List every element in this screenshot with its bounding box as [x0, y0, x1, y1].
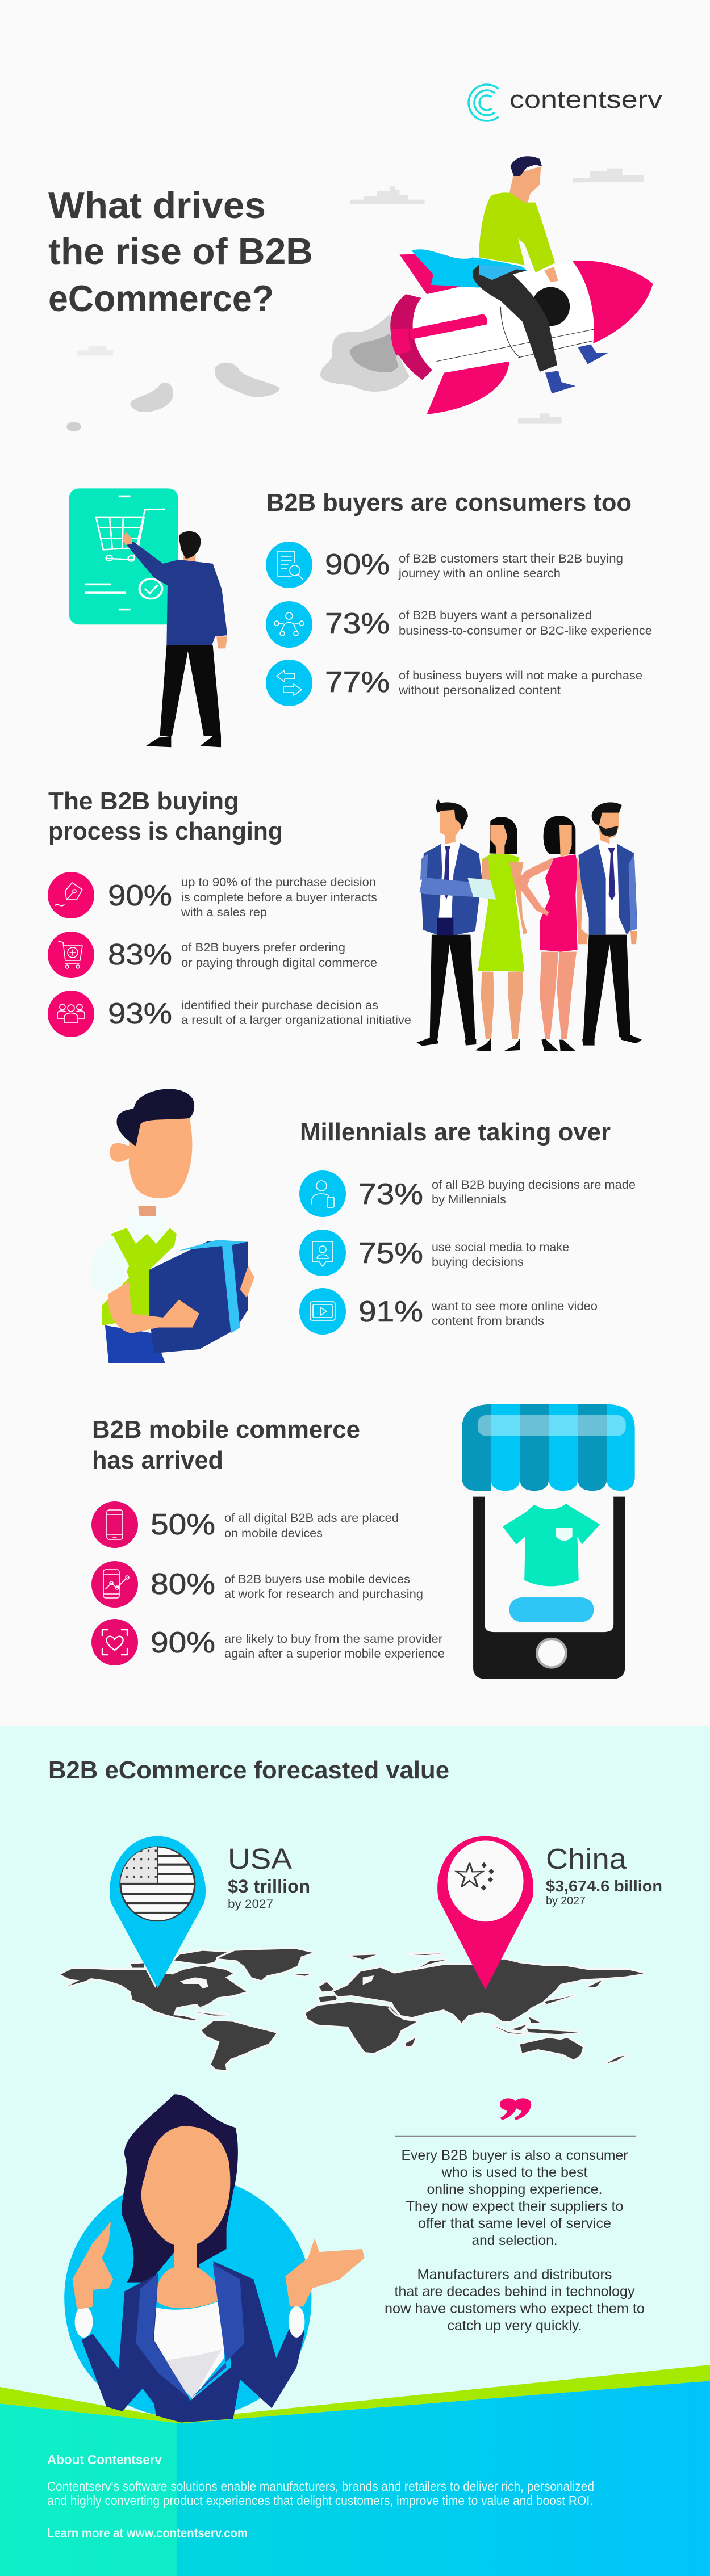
stat: 93% organizational initiative: [48, 991, 411, 1037]
description: [398, 669, 642, 697]
description: [432, 1178, 636, 1206]
stat: 73% decisions by Millennials: [299, 1170, 636, 1217]
description: of all B2B buying decisions are made: [432, 1178, 636, 1191]
description: at work for research and purchasing: [224, 1588, 423, 1601]
heading: B2B mobile commerce: [92, 1416, 360, 1444]
China value: China: [546, 1843, 627, 1875]
heading: [92, 1416, 360, 1474]
heading: The B2B buying: [48, 787, 239, 815]
description: by Millennials: [432, 1193, 506, 1206]
panel: B2B mobile commerce has arrived: [91, 1404, 635, 1679]
description: content from brands: [432, 1315, 544, 1328]
illustration: man at tablet with cart: [69, 488, 227, 747]
description: [224, 1573, 423, 1601]
stat: 73% B2C-like experience: [266, 601, 652, 648]
heading: B2B buyers are consumers too: [266, 489, 632, 517]
description: of B2B buyers prefer ordering: [181, 941, 345, 954]
description: on mobile devices: [224, 1527, 323, 1540]
illustration: woman presenting: [64, 2094, 365, 2423]
China pin: [437, 1836, 533, 1990]
title: eCommerce?: [48, 278, 274, 319]
description: is complete before a buyer interacts: [181, 891, 377, 904]
description: [398, 552, 623, 580]
quote text: Manufacturers and distributors: [417, 2267, 612, 2283]
quote text: who is used to the best: [441, 2164, 588, 2180]
percent: 77%: [325, 666, 390, 699]
quote text: online shopping experience.: [427, 2181, 602, 2197]
footer: about Contentserv: [47, 2452, 594, 2540]
percent: 91%: [358, 1295, 423, 1328]
description: [224, 1633, 445, 1660]
percent: 90%: [108, 879, 172, 912]
panel: Millennials are taking over: [90, 1089, 636, 1363]
stat: 90% purchase decision: [48, 872, 377, 919]
percent: 90%: [325, 548, 390, 581]
quote text: now have customers who expect them to: [385, 2301, 645, 2317]
icon: heart in frame: [91, 1619, 138, 1665]
icon: person with phone: [299, 1170, 346, 1217]
description: [181, 876, 377, 919]
panel: The B2B buying process is changing: [48, 787, 642, 1051]
stat: 83% digital commerce: [48, 932, 377, 978]
smoke trail and small clouds: [66, 346, 280, 431]
heading: [48, 787, 283, 845]
quote: [385, 2098, 645, 2334]
stat: 50% mobile ads: [91, 1501, 399, 1548]
quote text: offer that same level of service: [418, 2216, 611, 2231]
quote text: and selection.: [471, 2233, 558, 2248]
world map: [61, 1949, 644, 2070]
percent: 73%: [325, 607, 390, 640]
description: up to 90% of the purchase decision: [181, 876, 376, 889]
icon: profile speech bubble: [299, 1230, 346, 1276]
icon: quotation mark: [500, 2098, 531, 2120]
icon: phone with chart: [91, 1561, 138, 1608]
China value: $3,674.6 billion: [546, 1877, 662, 1895]
panel: B2B buyers are consumers too: [69, 488, 652, 747]
description: identified their purchase decision as: [181, 999, 378, 1012]
icon: team: [48, 991, 94, 1037]
quote text: catch up very quickly.: [448, 2318, 582, 2334]
decorative band and footer background: [0, 2365, 710, 2576]
description: business-to-consumer or B2C-like experience: [399, 624, 652, 637]
panel background: [0, 1726, 710, 2576]
illustration: young man holding box: [90, 1089, 254, 1363]
illustration: smartphone storefront: [462, 1404, 635, 1679]
description: of all digital B2B ads are placed: [224, 1512, 399, 1525]
quote text: [385, 2147, 645, 2334]
percent: 93%: [108, 997, 172, 1030]
USA value: $3 trillion: [228, 1876, 310, 1897]
icon: video player: [299, 1288, 346, 1335]
USA pin: [110, 1836, 206, 1988]
description: [399, 609, 652, 637]
title: the rise of B2B: [48, 230, 313, 272]
logo: contentserv: [469, 85, 662, 121]
footer: about Contentserv: Learn more at www.contentserv.com: [47, 2525, 248, 2540]
quote text: that are decades behind in technology: [394, 2284, 635, 2300]
description: buying decisions: [432, 1256, 524, 1269]
title: [48, 184, 313, 319]
percent: 83%: [108, 938, 172, 971]
description: of B2B customers start their B2B buying: [399, 552, 623, 565]
stat: 91% online video: [299, 1288, 598, 1335]
USA value: USA: [228, 1843, 292, 1875]
stat: 77% personalized content: [266, 660, 642, 706]
heading: B2B eCommerce forecasted value: [48, 1756, 449, 1784]
USA value: by 2027: [228, 1898, 273, 1911]
logo: contentserv: contentserv: [509, 86, 662, 114]
heading: has arrived: [92, 1446, 223, 1474]
description: of B2B buyers use mobile devices: [224, 1573, 410, 1586]
footer: about Contentserv: and highly converting product experiences that delight customers, improve time to value and boost ROI.: [47, 2493, 593, 2508]
icon: exchange arrows: [266, 660, 312, 706]
USA value: [228, 1843, 310, 1911]
China value: [546, 1843, 662, 1907]
description: [181, 941, 377, 970]
title: What drives: [48, 184, 266, 226]
percent: 80%: [151, 1568, 215, 1601]
icon: cart with plus: [48, 932, 94, 978]
footer: about Contentserv: Contentserv's software solutions enable manufacturers, brands and retailers to deliver rich, personalized: [47, 2479, 594, 2494]
description: a result of a larger organizational initiative: [181, 1014, 411, 1027]
China value: by 2027: [546, 1895, 586, 1907]
description: want to see more online video: [431, 1300, 598, 1313]
quote text: They now expect their suppliers to: [406, 2199, 624, 2214]
stat: 90% online search: [266, 542, 623, 588]
description: or paying through digital commerce: [181, 956, 377, 970]
description: [181, 999, 411, 1027]
description: journey with an online search: [398, 567, 561, 580]
percent: 50%: [151, 1508, 215, 1541]
stat: 80% research at work: [91, 1561, 423, 1608]
heading: Millennials are taking over: [300, 1118, 611, 1146]
header section: [48, 85, 662, 431]
percent: 75%: [358, 1237, 423, 1270]
illustration: group of four business people: [416, 799, 642, 1051]
percent: 73%: [358, 1178, 423, 1211]
icon: pen nib: [48, 872, 94, 918]
description: [431, 1300, 598, 1328]
map: Europe, Asia, Africa and Oceania: [306, 1954, 644, 2063]
heading: process is changing: [48, 817, 283, 845]
description: of B2B buyers want a personalized: [399, 609, 592, 622]
percent: 90%: [151, 1626, 215, 1659]
description: [432, 1241, 569, 1269]
icon: network of people: [266, 601, 312, 648]
quote text: Every B2B buyer is also a consumer: [401, 2147, 628, 2163]
panel: B2B eCommerce forecasted value: [0, 1726, 710, 2576]
stat: 90% repeat purchase: [91, 1619, 445, 1665]
stat: 75% social media: [299, 1230, 569, 1276]
description: without personalized content: [398, 684, 561, 697]
description: of business buyers will not make a purchase: [399, 669, 642, 682]
icon: document search: [266, 542, 312, 588]
icon: smartphone: [91, 1501, 138, 1548]
illustration: man riding rocket: [320, 156, 653, 424]
description: use social media to make: [432, 1241, 569, 1254]
description: again after a superior mobile experience: [224, 1647, 445, 1660]
description: are likely to buy from the same provider: [224, 1633, 442, 1646]
map: Americas and Greenland: [61, 1949, 312, 2070]
description: [224, 1512, 399, 1540]
footer: about Contentserv: About Contentserv: [47, 2452, 162, 2467]
description: with a sales rep: [181, 906, 267, 919]
